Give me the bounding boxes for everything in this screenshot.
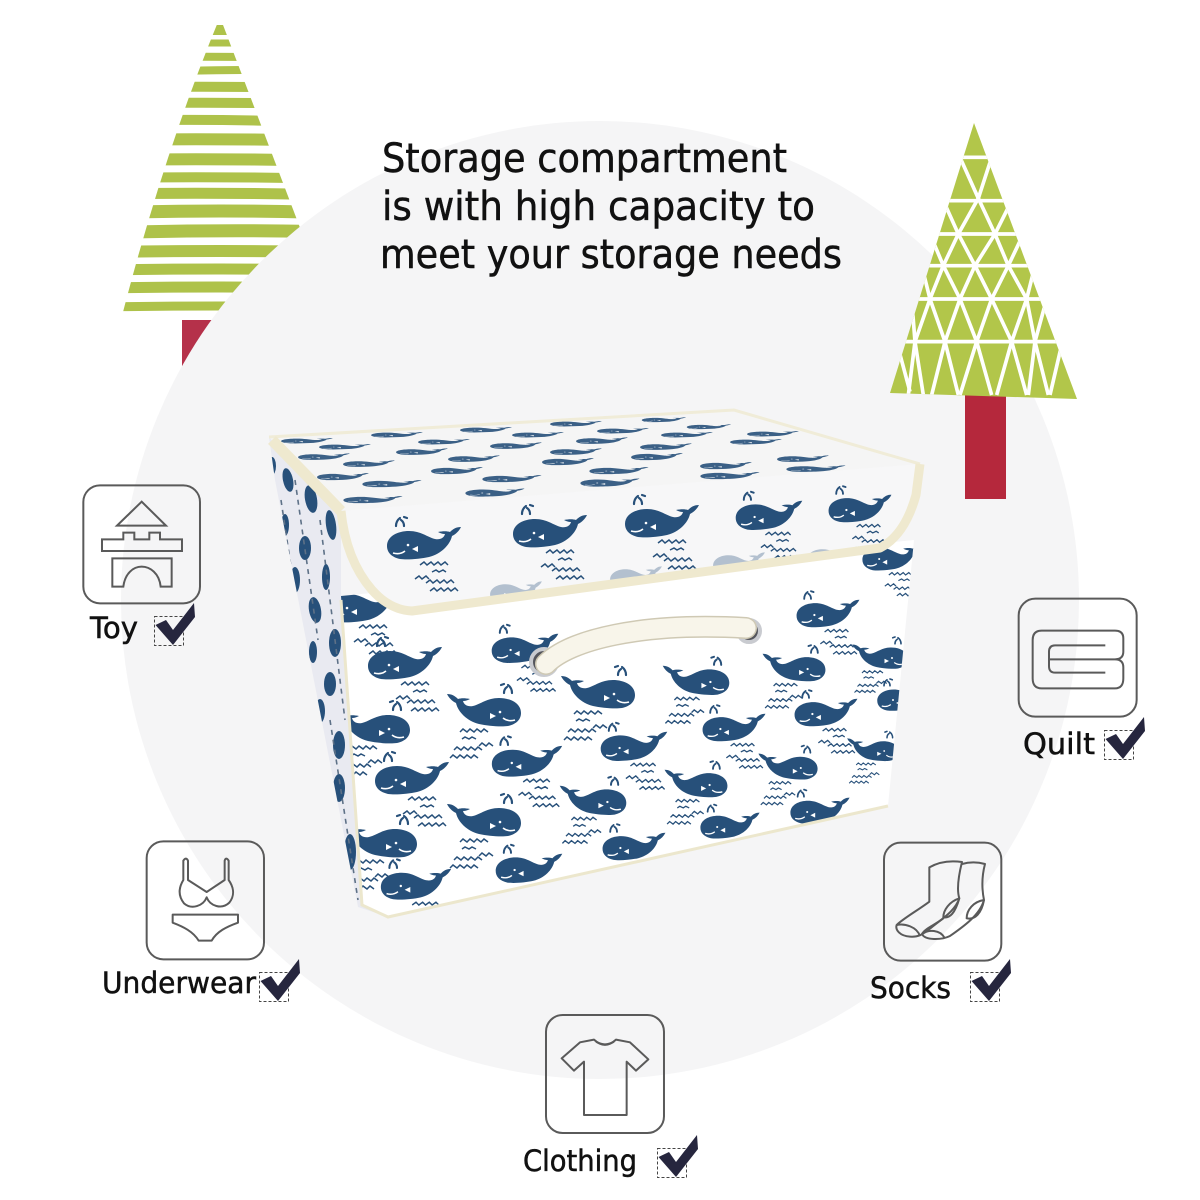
- label: Socks: Socks: [870, 971, 951, 1005]
- icon: triangle pattern tree (right): [887, 123, 1080, 499]
- heading: Storage compartment: [382, 136, 787, 182]
- check mark: [154, 603, 195, 646]
- icon: toy blocks: [83, 485, 200, 603]
- item: clothing: [523, 1015, 698, 1178]
- item: toy: [83, 485, 200, 646]
- check mark: [260, 959, 300, 1002]
- rope handle: [531, 620, 760, 675]
- icon: pair of socks: [884, 843, 1001, 961]
- box left side: [270, 438, 372, 912]
- item: socks: [870, 843, 1011, 1005]
- label: Toy: Toy: [89, 611, 138, 645]
- item: underwear: [102, 841, 300, 1002]
- background circle: [121, 121, 1079, 1079]
- box front: [326, 537, 933, 930]
- icon: folded quilt: [1019, 599, 1137, 717]
- check mark: [658, 1135, 698, 1178]
- label: Underwear: Underwear: [102, 966, 256, 1000]
- heading: meet your storage needs: [380, 232, 842, 278]
- icon: striped tree (left): [123, 25, 300, 366]
- check mark: [970, 959, 1011, 1002]
- box lid top: [269, 410, 920, 511]
- storage box with whale pattern: [268, 410, 933, 930]
- icon: bra and briefs: [147, 841, 264, 959]
- label: Quilt: Quilt: [1023, 727, 1095, 761]
- box lid flap: [341, 464, 920, 611]
- icon: t-shirt: [546, 1015, 664, 1133]
- check mark: [1104, 717, 1145, 760]
- heading: is with high capacity to: [382, 184, 815, 230]
- heading: [380, 136, 842, 278]
- item: quilt: [1019, 599, 1145, 761]
- label: Clothing: Clothing: [523, 1144, 637, 1178]
